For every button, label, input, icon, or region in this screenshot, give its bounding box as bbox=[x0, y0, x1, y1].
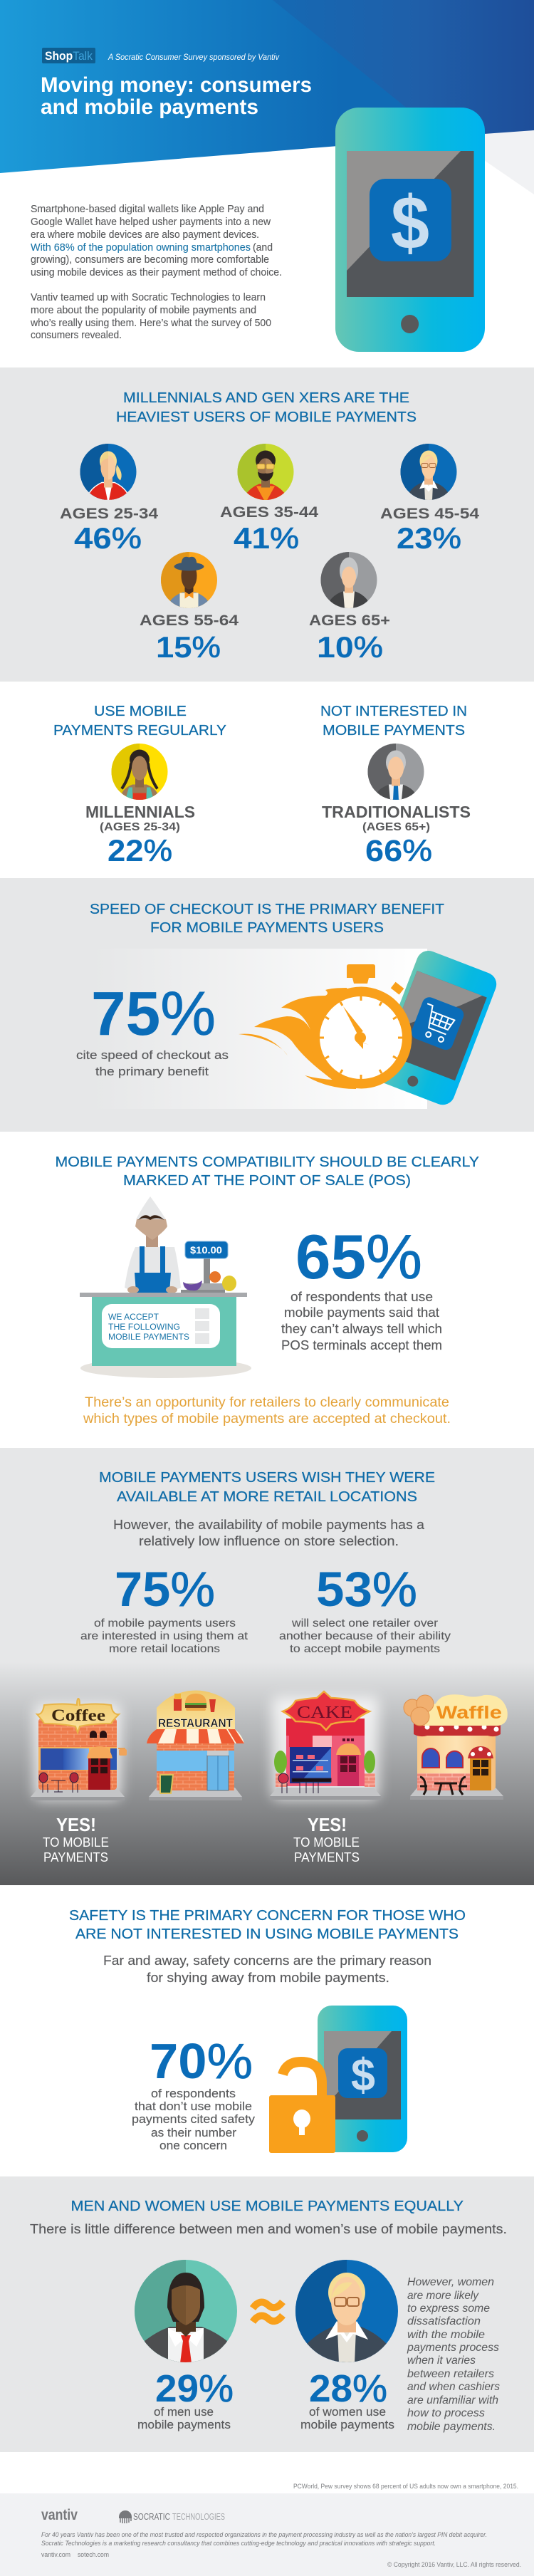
side note: are more likely bbox=[407, 2290, 479, 2302]
avatar: millennial woman bbox=[111, 744, 168, 801]
side note: how to process bbox=[407, 2407, 485, 2419]
stat caption: the primary benefit bbox=[95, 1065, 209, 1078]
intro text: Smartphone-based digital wallets like Apple Pay and bbox=[31, 203, 264, 215]
heading bbox=[69, 1908, 466, 1942]
side note: and when cashiers bbox=[407, 2381, 500, 2393]
avatar: woman bbox=[295, 2259, 399, 2363]
title: Moving money: consumers bbox=[41, 73, 312, 97]
heading: SPEED OF CHECKOUT IS THE PRIMARY BENEFIT bbox=[90, 902, 444, 917]
burger bbox=[174, 1694, 216, 1712]
column: traditionalists: NOT INTERESTED IN bbox=[320, 704, 467, 719]
panel: age groups bbox=[0, 367, 534, 682]
label: yes to mobile payments, coffee: YES! bbox=[56, 1814, 96, 1835]
accepted payments sign: THE FOLLOWING bbox=[108, 1322, 180, 1332]
intro text: who’s really using them. Here’s what the survey of 500 bbox=[30, 317, 271, 329]
big stat: 70% bbox=[150, 2033, 253, 2089]
stat caption: as their number bbox=[151, 2126, 236, 2139]
label: yes to mobile payments, cake: PAYMENTS bbox=[294, 1850, 360, 1865]
stat: 75 percent: are interested in using them at bbox=[80, 1630, 248, 1642]
heading: MILLENNIALS AND GEN XERS ARE THE bbox=[123, 390, 409, 406]
column: millennials bbox=[53, 704, 226, 868]
panel: speed of checkout bbox=[0, 878, 534, 1132]
heading: MOBILE PAYMENTS USERS WISH THEY WERE bbox=[99, 1470, 435, 1486]
panel: safety bbox=[0, 1885, 534, 2176]
stat caption: POS terminals accept them bbox=[281, 1338, 442, 1352]
side note: are unfamiliar with bbox=[407, 2394, 498, 2406]
subheading bbox=[113, 1518, 425, 1548]
cashier figure bbox=[125, 1196, 181, 1293]
company descriptions: Socratic Technologies is a marketing research consultancy that combines cutting-edge technology and practical innovations with strategic support. bbox=[41, 2540, 436, 2547]
accepted payments sign: WE ACCEPT bbox=[108, 1312, 159, 1322]
intro text: using mobile devices as their payment method of choice. bbox=[31, 266, 282, 278]
stat: women: 28% bbox=[309, 2367, 387, 2410]
logo: Socratic Technologies bbox=[119, 2510, 225, 2523]
heading: MEN AND WOMEN USE MOBILE PAYMENTS EQUALLY bbox=[71, 2199, 464, 2214]
avatar: ages 45-54 bbox=[400, 443, 457, 500]
avatar: older man bbox=[367, 744, 424, 801]
store: cake: CAKE bbox=[297, 1704, 352, 1722]
age labels and percentages: AGES 25-34 bbox=[60, 506, 158, 522]
title bbox=[41, 73, 312, 119]
panel: men and women bbox=[0, 2176, 534, 2452]
side note: to express some bbox=[407, 2303, 490, 2315]
age labels and percentages: 23% bbox=[397, 521, 461, 555]
store: cake bbox=[270, 1691, 381, 1800]
subheading: There is little difference between men and women’s use of mobile payments. bbox=[30, 2222, 507, 2236]
avatar: ages 35-44 bbox=[237, 443, 294, 500]
panel: point of sale bbox=[0, 1132, 534, 1448]
panel: generational comparison bbox=[54, 705, 470, 862]
stat caption bbox=[281, 1290, 442, 1352]
column: millennials: USE MOBILE bbox=[94, 704, 187, 719]
heading bbox=[56, 1154, 479, 1189]
label: yes to mobile payments, cake: TO MOBILE bbox=[293, 1835, 360, 1850]
counter bbox=[80, 1293, 247, 1297]
source note bbox=[0, 2452, 534, 2493]
stat caption: of respondents bbox=[151, 2087, 236, 2100]
stat: women: mobile payments bbox=[300, 2418, 394, 2431]
icon: phone with dollar bbox=[318, 2006, 407, 2152]
store: waffle: Waffle bbox=[436, 1703, 502, 1723]
intro text bbox=[30, 203, 282, 341]
column: millennials: MILLENNIALS bbox=[85, 803, 195, 821]
column: millennials: 22% bbox=[108, 834, 172, 868]
side note: between retailers bbox=[407, 2368, 494, 2380]
accepted payments sign bbox=[102, 1304, 220, 1348]
website links: vantiv.com bbox=[41, 2551, 70, 2558]
icon: open padlock bbox=[269, 2062, 335, 2153]
accepted payments sign: MOBILE PAYMENTS bbox=[108, 1332, 189, 1342]
intro text: Google Wallet have helped usher payments into a new bbox=[31, 216, 271, 228]
subheading: relatively low influence on store selection. bbox=[139, 1534, 399, 1548]
heading: ARE NOT INTERESTED IN USING MOBILE PAYMENTS bbox=[75, 1926, 459, 1942]
side note: with the mobile bbox=[407, 2329, 485, 2341]
age labels and percentages: AGES 45-54 bbox=[380, 506, 479, 522]
icon: tilted phone with cart bbox=[371, 947, 500, 1108]
stat caption: one concern bbox=[159, 2139, 227, 2152]
website links bbox=[41, 2551, 109, 2558]
column: millennials: PAYMENTS REGULARLY bbox=[53, 723, 226, 739]
stat caption bbox=[76, 1048, 229, 1078]
big stat: 75% bbox=[91, 979, 216, 1048]
icon: flaming stopwatch bbox=[239, 964, 412, 1089]
age labels and percentages: 10% bbox=[317, 630, 383, 664]
column: traditionalists: TRADITIONALISTS bbox=[322, 803, 471, 821]
side note bbox=[407, 2276, 500, 2433]
side note: payments process bbox=[407, 2342, 499, 2354]
label: yes to mobile payments, coffee: PAYMENTS bbox=[43, 1850, 108, 1865]
stat caption: cite speed of checkout as bbox=[76, 1048, 229, 1062]
logo: vantiv: vantiv bbox=[41, 2507, 78, 2523]
logo: Socratic Technologies: TECHNOLOGIES bbox=[172, 2511, 225, 2522]
stat: 53 percent: another because of their ability bbox=[279, 1630, 451, 1642]
side note: However, women bbox=[407, 2276, 494, 2288]
logo: Socratic Technologies: SOCRATIC bbox=[133, 2511, 170, 2522]
side note: dissatisfaction bbox=[407, 2315, 481, 2327]
intro text: more about the popularity of mobile payments and bbox=[31, 304, 256, 316]
heading bbox=[90, 902, 444, 936]
retailer opportunity callout bbox=[83, 1395, 451, 1427]
retailer opportunity callout: which types of mobile payments are accepted at checkout. bbox=[83, 1412, 451, 1427]
store: waffle bbox=[404, 1694, 508, 1800]
heading bbox=[99, 1470, 435, 1505]
heading: AVAILABLE AT MORE RETAIL LOCATIONS bbox=[117, 1489, 417, 1505]
column: traditionalists: 66% bbox=[365, 834, 432, 868]
stat: 53 percent: will select one retailer over bbox=[291, 1617, 439, 1629]
heading: MARKED AT THE POINT OF SALE (POS) bbox=[123, 1173, 411, 1189]
stat caption: they can’t always tell which bbox=[281, 1322, 442, 1336]
icon: phone with dollar: $ bbox=[391, 181, 429, 265]
store: coffee bbox=[31, 1699, 127, 1800]
panel: retail locations bbox=[0, 1448, 534, 1885]
survey sponsor line: A Socratic Consumer Survey sponsored by Vantiv bbox=[108, 52, 280, 62]
side note: mobile payments. bbox=[407, 2421, 496, 2433]
ShopTalk badge: ShopTalk bbox=[45, 49, 93, 63]
awning bbox=[147, 1729, 244, 1743]
stat caption: payments cited safety bbox=[132, 2112, 256, 2126]
icon: phone with dollar: $ bbox=[351, 2049, 375, 2100]
stat: women: of women use bbox=[309, 2405, 386, 2419]
title: and mobile payments bbox=[41, 95, 258, 119]
pale diagonal background shape bbox=[484, 130, 534, 194]
label: yes to mobile payments, coffee: TO MOBILE bbox=[43, 1835, 109, 1850]
age labels and percentages: AGES 55-64 bbox=[140, 612, 239, 629]
stat: 53 percent bbox=[279, 1562, 451, 1655]
big stat: 65% bbox=[295, 1221, 422, 1292]
stat: 53 percent: to accept mobile payments bbox=[290, 1643, 440, 1655]
subheading: However, the availability of mobile payments has a bbox=[113, 1518, 425, 1532]
stat: 75 percent: more retail locations bbox=[109, 1643, 220, 1655]
stat: men: 29% bbox=[155, 2367, 234, 2410]
stat: 75 percent: 75% bbox=[115, 1562, 215, 1617]
avatar: ages 65+ bbox=[320, 551, 377, 608]
illustration: cashier at counter bbox=[80, 1196, 251, 1378]
column: traditionalists: MOBILE PAYMENTS bbox=[323, 723, 465, 739]
stat caption: of respondents that use bbox=[290, 1290, 433, 1304]
intro text: growing), consumers are becoming more comfortable bbox=[31, 254, 269, 266]
column: millennials: (AGES 25-34) bbox=[100, 821, 180, 833]
age labels and percentages: 15% bbox=[156, 630, 221, 664]
heading: SAFETY IS THE PRIMARY CONCERN FOR THOSE WHO bbox=[69, 1908, 466, 1924]
age labels and percentages: 46% bbox=[74, 521, 142, 555]
panel: header and intro bbox=[0, 0, 534, 367]
stat caption bbox=[132, 2087, 256, 2152]
retailer opportunity callout: There’s an opportunity for retailers to clearly communicate bbox=[85, 1395, 449, 1410]
heading: MOBILE PAYMENTS COMPATIBILITY SHOULD BE CLEARLY bbox=[56, 1154, 479, 1170]
stat: men: mobile payments bbox=[137, 2418, 231, 2431]
website links: sotech.com bbox=[78, 2551, 109, 2558]
age labels and percentages: 41% bbox=[234, 521, 299, 555]
label: yes to mobile payments, coffee bbox=[43, 1814, 109, 1865]
panel: footer bbox=[0, 2493, 534, 2576]
stat: 53 percent: 53% bbox=[316, 1562, 417, 1617]
heading bbox=[116, 390, 417, 425]
label: yes to mobile payments, cake bbox=[293, 1814, 360, 1865]
stat: men: of men use bbox=[154, 2405, 214, 2419]
side note: when it varies bbox=[407, 2355, 476, 2367]
subheading: for shying away from mobile payments. bbox=[147, 1971, 389, 1985]
icon: phone with dollar bbox=[335, 108, 485, 352]
stat caption: mobile payments said that bbox=[284, 1305, 439, 1320]
age labels and percentages: AGES 65+ bbox=[309, 612, 390, 629]
subheading: Far and away, safety concerns are the primary reason bbox=[103, 1954, 431, 1968]
icon: approximately equal bbox=[253, 2302, 283, 2322]
stat: 75 percent bbox=[80, 1562, 248, 1655]
stat: men bbox=[137, 2367, 234, 2431]
intro text: With 68% of the population owning smartphones bbox=[31, 241, 251, 254]
scale: $10.00 bbox=[190, 1244, 222, 1256]
stat caption: that don’t use mobile bbox=[135, 2100, 252, 2113]
stat: women bbox=[300, 2367, 394, 2431]
column: traditionalists bbox=[320, 704, 471, 868]
copyright: © Copyright 2016 Vantiv, LLC. All rights reserved. bbox=[387, 2561, 521, 2569]
scale bbox=[181, 1241, 236, 1293]
intro text: Vantiv teamed up with Socratic Technologies to learn bbox=[31, 291, 266, 303]
header gradient band bbox=[0, 0, 534, 173]
heading: FOR MOBILE PAYMENTS USERS bbox=[150, 920, 384, 936]
column: traditionalists: (AGES 65+) bbox=[362, 821, 430, 833]
subheading bbox=[103, 1954, 431, 1985]
intro text: consumers revealed. bbox=[31, 329, 122, 341]
avatar: man bbox=[134, 2259, 238, 2363]
store: coffee: Coffee bbox=[51, 1706, 105, 1724]
age labels and percentages bbox=[60, 504, 479, 664]
store: restaurant: RESTAURANT bbox=[158, 1716, 234, 1730]
company descriptions bbox=[41, 2531, 487, 2547]
store: restaurant bbox=[147, 1691, 244, 1800]
age labels and percentages: AGES 35-44 bbox=[220, 504, 318, 521]
heading: HEAVIEST USERS OF MOBILE PAYMENTS bbox=[116, 410, 417, 425]
avatar: ages 55-64 bbox=[161, 551, 218, 608]
intro text: era where mobile devices are also payment devices. bbox=[31, 229, 259, 241]
stat: 75 percent: of mobile payments users bbox=[94, 1617, 236, 1629]
label: yes to mobile payments, cake: YES! bbox=[308, 1814, 347, 1835]
avatar: ages 25-34 bbox=[80, 443, 137, 500]
intro text: (and bbox=[253, 241, 273, 254]
company descriptions: For 40 years Vantiv has been one of the most trusted and respected organizations in the payment processing industry as well as the nation’s largest PIN debit acquirer. bbox=[41, 2531, 487, 2538]
